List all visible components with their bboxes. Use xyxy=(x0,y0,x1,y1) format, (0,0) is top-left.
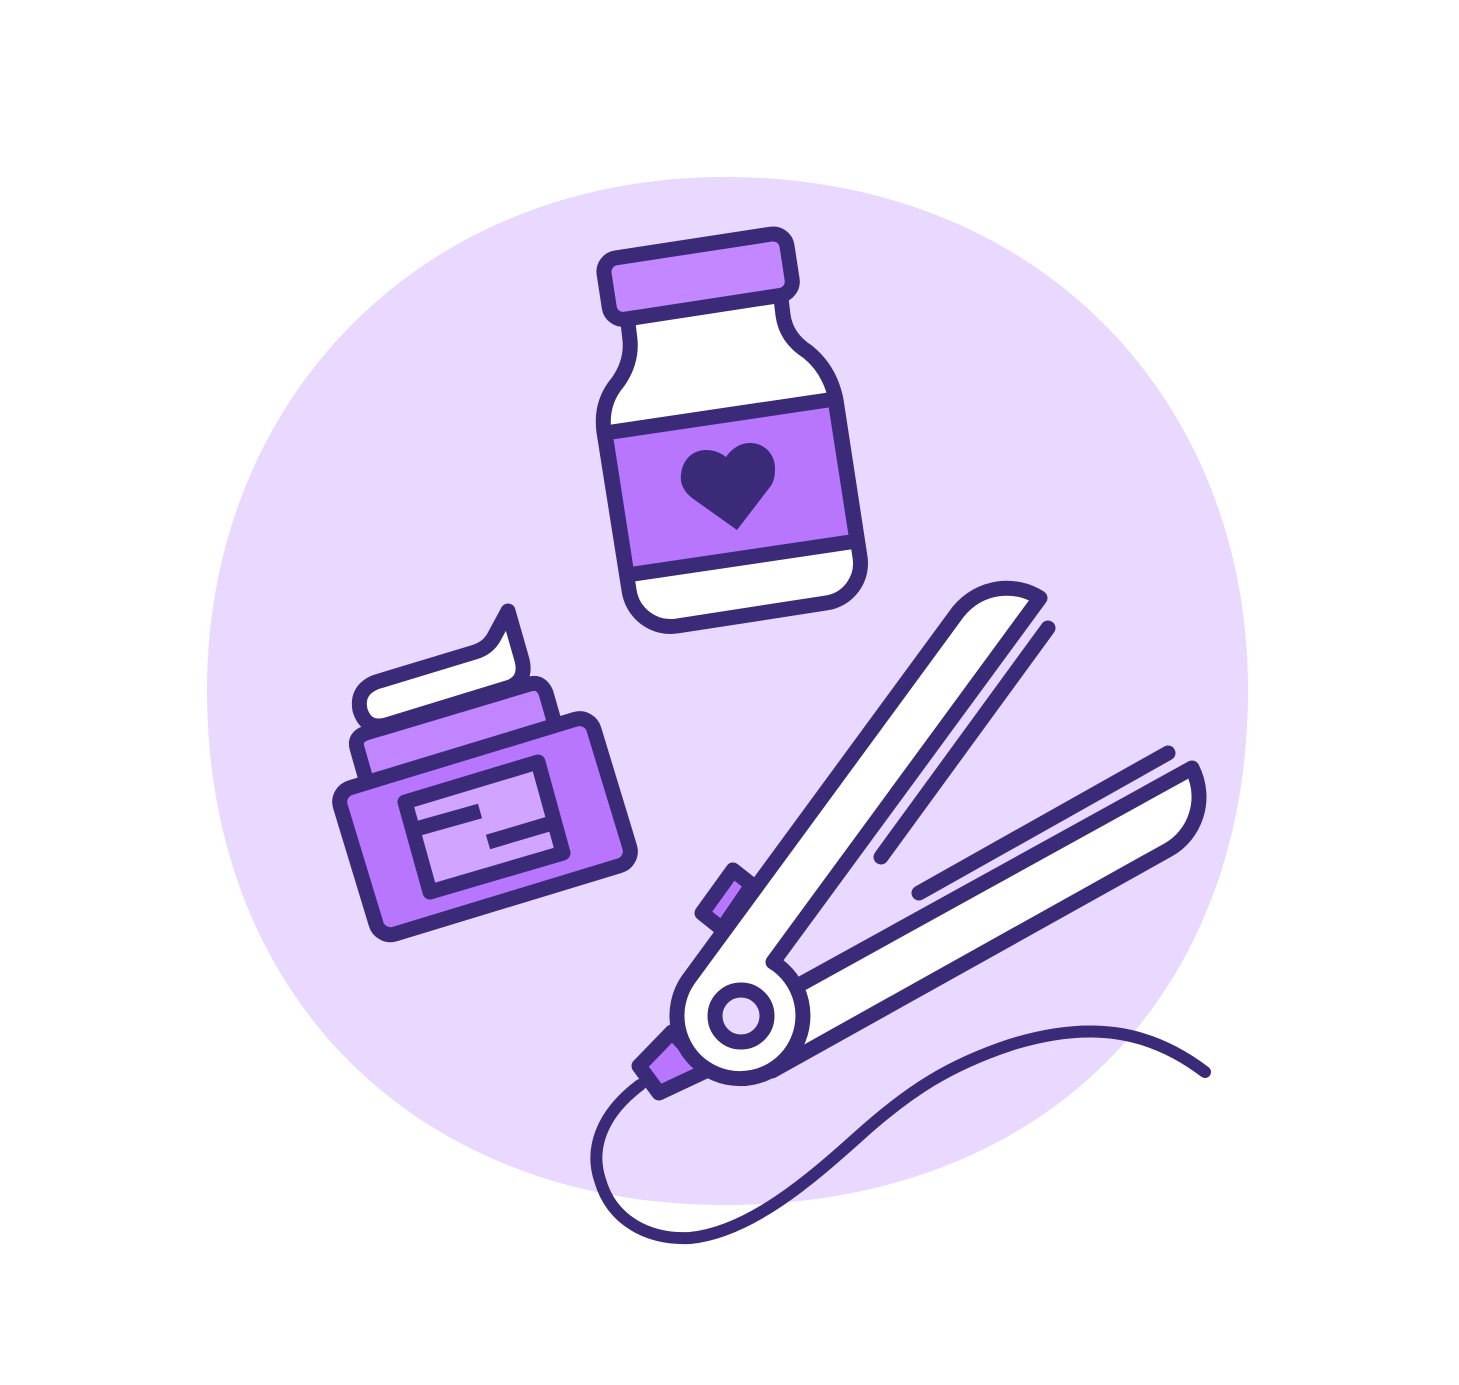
cream swirl xyxy=(359,611,523,726)
slider button xyxy=(702,870,752,929)
icon: hair straightener xyxy=(596,588,1205,1238)
bottle label band xyxy=(605,399,857,575)
power cord xyxy=(596,1031,1205,1238)
bottle body xyxy=(603,290,861,626)
lower arm xyxy=(772,768,1199,1071)
jar lid xyxy=(356,683,558,790)
hinge ring xyxy=(715,990,767,1042)
plate line lower xyxy=(919,753,1168,893)
upper arm xyxy=(677,588,1040,1079)
jar label text bars xyxy=(416,811,552,842)
jar label xyxy=(405,762,563,892)
bottle cap xyxy=(602,232,794,321)
icon: supplement bottle xyxy=(602,232,861,626)
icon: cream jar xyxy=(336,611,634,938)
jar body xyxy=(336,715,634,938)
cord plug xyxy=(639,1032,708,1093)
background blob xyxy=(207,177,1248,1205)
icon: heart xyxy=(681,443,775,530)
plate line upper xyxy=(881,628,1048,857)
